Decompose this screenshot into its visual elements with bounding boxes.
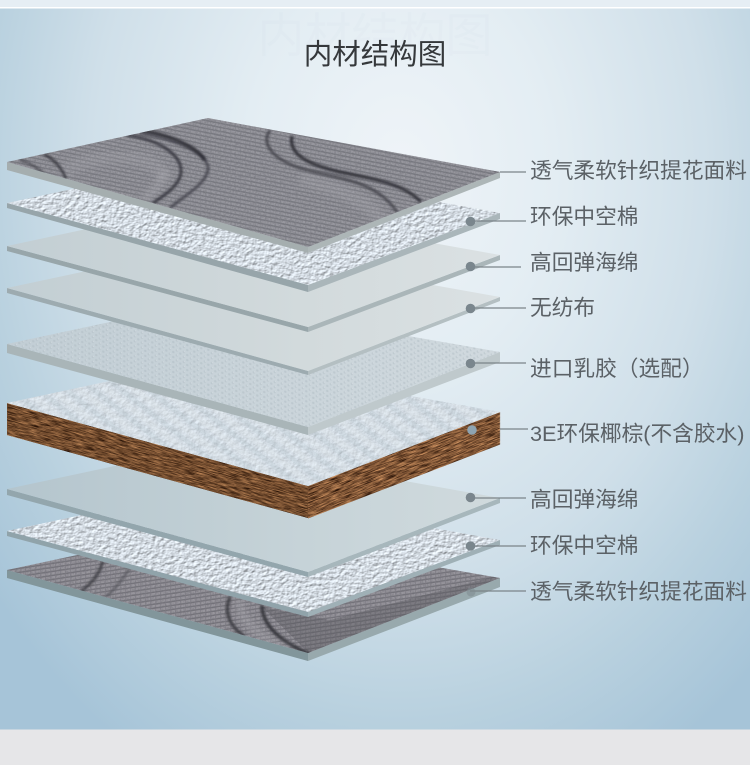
label: hollow cotton: 环保中空棉 xyxy=(530,204,638,229)
callout marker 2 xyxy=(466,217,526,226)
layer 5: imported latex xyxy=(7,301,500,435)
layer 3: high-resilience foam xyxy=(7,203,500,332)
callout marker 1 xyxy=(500,171,526,173)
layer 8: hollow cotton xyxy=(7,488,500,617)
callout marker 9 xyxy=(466,588,526,596)
label: imported latex optional: 进口乳胶（选配） xyxy=(530,356,704,381)
label: high-resilience foam lower: 高回弹海绵 xyxy=(530,487,638,512)
layer 9: bottom jacquard fabric xyxy=(7,552,500,661)
label: high-resilience foam: 高回弹海绵 xyxy=(530,250,638,275)
layer 2: hollow cotton xyxy=(7,160,500,292)
layer 7: high-resilience foam xyxy=(7,446,500,577)
label: 3E coconut palm: 3E环保椰棕(不含胶水) xyxy=(530,421,744,446)
callout marker 4 xyxy=(466,304,526,313)
label: non-woven fabric: 无纺布 xyxy=(530,295,595,320)
callout marker 3 xyxy=(466,262,521,271)
label: breathable soft jacquard fabric lower: 透气柔软针织提花面料 xyxy=(530,579,747,604)
layer 1: top jacquard fabric xyxy=(7,118,500,253)
label: hollow cotton lower: 环保中空棉 xyxy=(530,533,638,558)
label: breathable soft jacquard fabric: 透气柔软针织提花面料 xyxy=(530,158,747,183)
layer 4: non-woven fabric xyxy=(7,245,500,375)
callout marker 8 xyxy=(466,541,526,551)
title: 内材结构图 xyxy=(304,39,446,71)
callout marker 6 xyxy=(467,425,528,435)
callout marker 7 xyxy=(466,493,526,502)
callout marker 5 xyxy=(466,359,526,368)
layer 6: 3E coconut palm xyxy=(7,360,500,518)
title reflection: 内材结构图 xyxy=(258,9,492,62)
